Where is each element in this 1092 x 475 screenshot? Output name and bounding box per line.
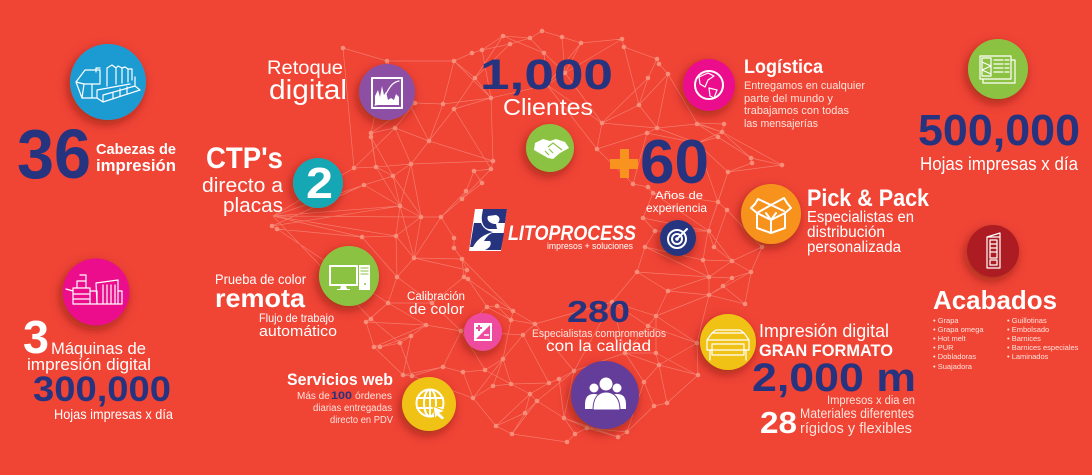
caption [27, 339, 151, 374]
text [202, 142, 284, 217]
text: diarias entregadas [313, 403, 392, 414]
materials caption [800, 406, 914, 437]
number 500,000: 500,000 [918, 106, 1080, 155]
text [267, 58, 347, 105]
tagline: impresos + soluciones [547, 241, 633, 252]
caption: Especialistas comprometidos [532, 328, 666, 340]
number 280: 280 [567, 294, 630, 329]
big number 36: 36 [17, 115, 91, 193]
panel: pick and pack [741, 184, 930, 256]
heading: Pick & Pack [807, 185, 930, 212]
icon: wide format printer [700, 314, 756, 370]
caption: Impresos x dia en [827, 395, 915, 407]
panel: anos de experiencia [610, 128, 709, 256]
number 60: 60 [640, 128, 709, 197]
panel: especialistas [532, 294, 666, 429]
text: remota [215, 283, 306, 313]
heading: Acabados [933, 285, 1057, 315]
panel: maquinas de impresion digital [23, 258, 173, 422]
icon: offset press [70, 44, 146, 120]
list: column two: • Laminados [1007, 352, 1049, 361]
text [215, 271, 337, 340]
text: directo en PDV [330, 415, 393, 426]
caption [646, 190, 707, 215]
heading: Logística [744, 57, 823, 78]
icon: globe [683, 59, 735, 111]
text: Flujo de trabajo [259, 311, 334, 325]
list: column two: • Barnices especiales [1007, 343, 1079, 352]
panel: cabezas de impresion [17, 44, 176, 193]
text: digital [269, 74, 347, 105]
text: directo a [202, 175, 284, 197]
caption: impresión digital [27, 355, 151, 374]
panel: retoque digital [267, 58, 415, 120]
text: Prueba de color [215, 271, 306, 287]
caption: Años de [655, 190, 703, 202]
icon: handshake [526, 124, 574, 172]
list: column one: • Suajadora [933, 362, 973, 371]
materials caption: rígidos y flexibles [800, 420, 912, 437]
description: las mensajerías [744, 118, 818, 130]
description: parte del mundo y [744, 93, 833, 105]
caption hojas: Hojas impresas x día [54, 406, 173, 422]
wordmark: LITOPROCESS [508, 222, 636, 245]
list: column one: • Hot melt [933, 334, 967, 343]
panel: gran formato [700, 314, 916, 440]
caption: Hojas impresas x día [920, 154, 1079, 174]
icon: people [571, 361, 639, 429]
panel: clientes [480, 51, 613, 172]
number 300,000: 300,000 [33, 370, 171, 409]
list: column two: • Guillotinas [1007, 316, 1047, 325]
heading: GRAN FORMATO [759, 342, 893, 360]
heading [759, 321, 893, 360]
text: placas [223, 195, 283, 217]
text: Más de [297, 391, 330, 402]
list: column one: • Grapa [933, 316, 959, 325]
logo mark [469, 209, 507, 251]
label: Cabezas de [96, 142, 176, 158]
list: column two [1007, 316, 1079, 361]
list: column one: • Grapa omega [933, 325, 984, 334]
description: trabajamos con todas [744, 105, 849, 117]
text: órdenes [355, 391, 392, 402]
text: automático [259, 323, 337, 340]
network mesh ring [270, 29, 784, 444]
panel: calibracion de color [407, 291, 502, 351]
materials caption: Materiales diferentes [800, 406, 914, 421]
panel: servicios web [287, 370, 456, 431]
list: column one [933, 316, 984, 371]
icon: histogram [359, 64, 415, 120]
list: column one: • PUR [933, 343, 954, 352]
icon: exposure [464, 313, 502, 351]
label: impresión [96, 156, 176, 175]
panel: hojas impresas [918, 39, 1080, 174]
number 28: 28 [760, 405, 797, 440]
caption: Clientes [503, 94, 593, 120]
icon: finishing machine [967, 225, 1019, 277]
logo: litoprocess [469, 209, 636, 252]
description: Especialistas en [807, 209, 914, 226]
number 3: 3 [23, 311, 49, 363]
description: personalizada [807, 239, 901, 256]
list: column two: • Barnices [1007, 334, 1041, 343]
list: column two: • Embolsado [1007, 325, 1049, 334]
panel: prueba de color remota [215, 246, 379, 340]
description: Entregamos en cualquier [744, 80, 865, 92]
label [96, 142, 176, 175]
panel: acabados [933, 225, 1079, 371]
text [287, 370, 393, 426]
icon: printed sheets [968, 39, 1028, 99]
description: distribución [807, 224, 885, 241]
icon: digital press [62, 258, 130, 326]
icon: target [660, 220, 696, 256]
caption: experiencia [646, 201, 707, 215]
number 1,000: 1,000 [480, 51, 613, 99]
caption [532, 328, 666, 355]
panel: logistica [683, 57, 865, 130]
caption: Máquinas de [51, 339, 146, 358]
caption: con la calidad [546, 338, 651, 355]
text: de color [409, 301, 464, 318]
icon: box [741, 184, 801, 244]
description [807, 209, 914, 256]
heading: Impresión digital [759, 321, 889, 341]
number 2,000 m: 2,000 m [752, 356, 916, 400]
panel: CTP [202, 142, 343, 217]
icon: orange plus [610, 149, 638, 178]
icon: number 2 [293, 158, 343, 208]
text: Calibración [407, 291, 465, 303]
text [407, 291, 465, 318]
text: Retoque [267, 58, 343, 79]
icon: computer [319, 246, 379, 306]
text: CTP's [206, 142, 283, 175]
text: Servicios web [287, 370, 393, 389]
icon: number 2: 2 [306, 159, 333, 208]
list: column one: • Dobladoras [933, 352, 976, 361]
description [744, 80, 865, 130]
icon: globe with cursor [402, 377, 456, 431]
text: 100 [331, 390, 352, 402]
